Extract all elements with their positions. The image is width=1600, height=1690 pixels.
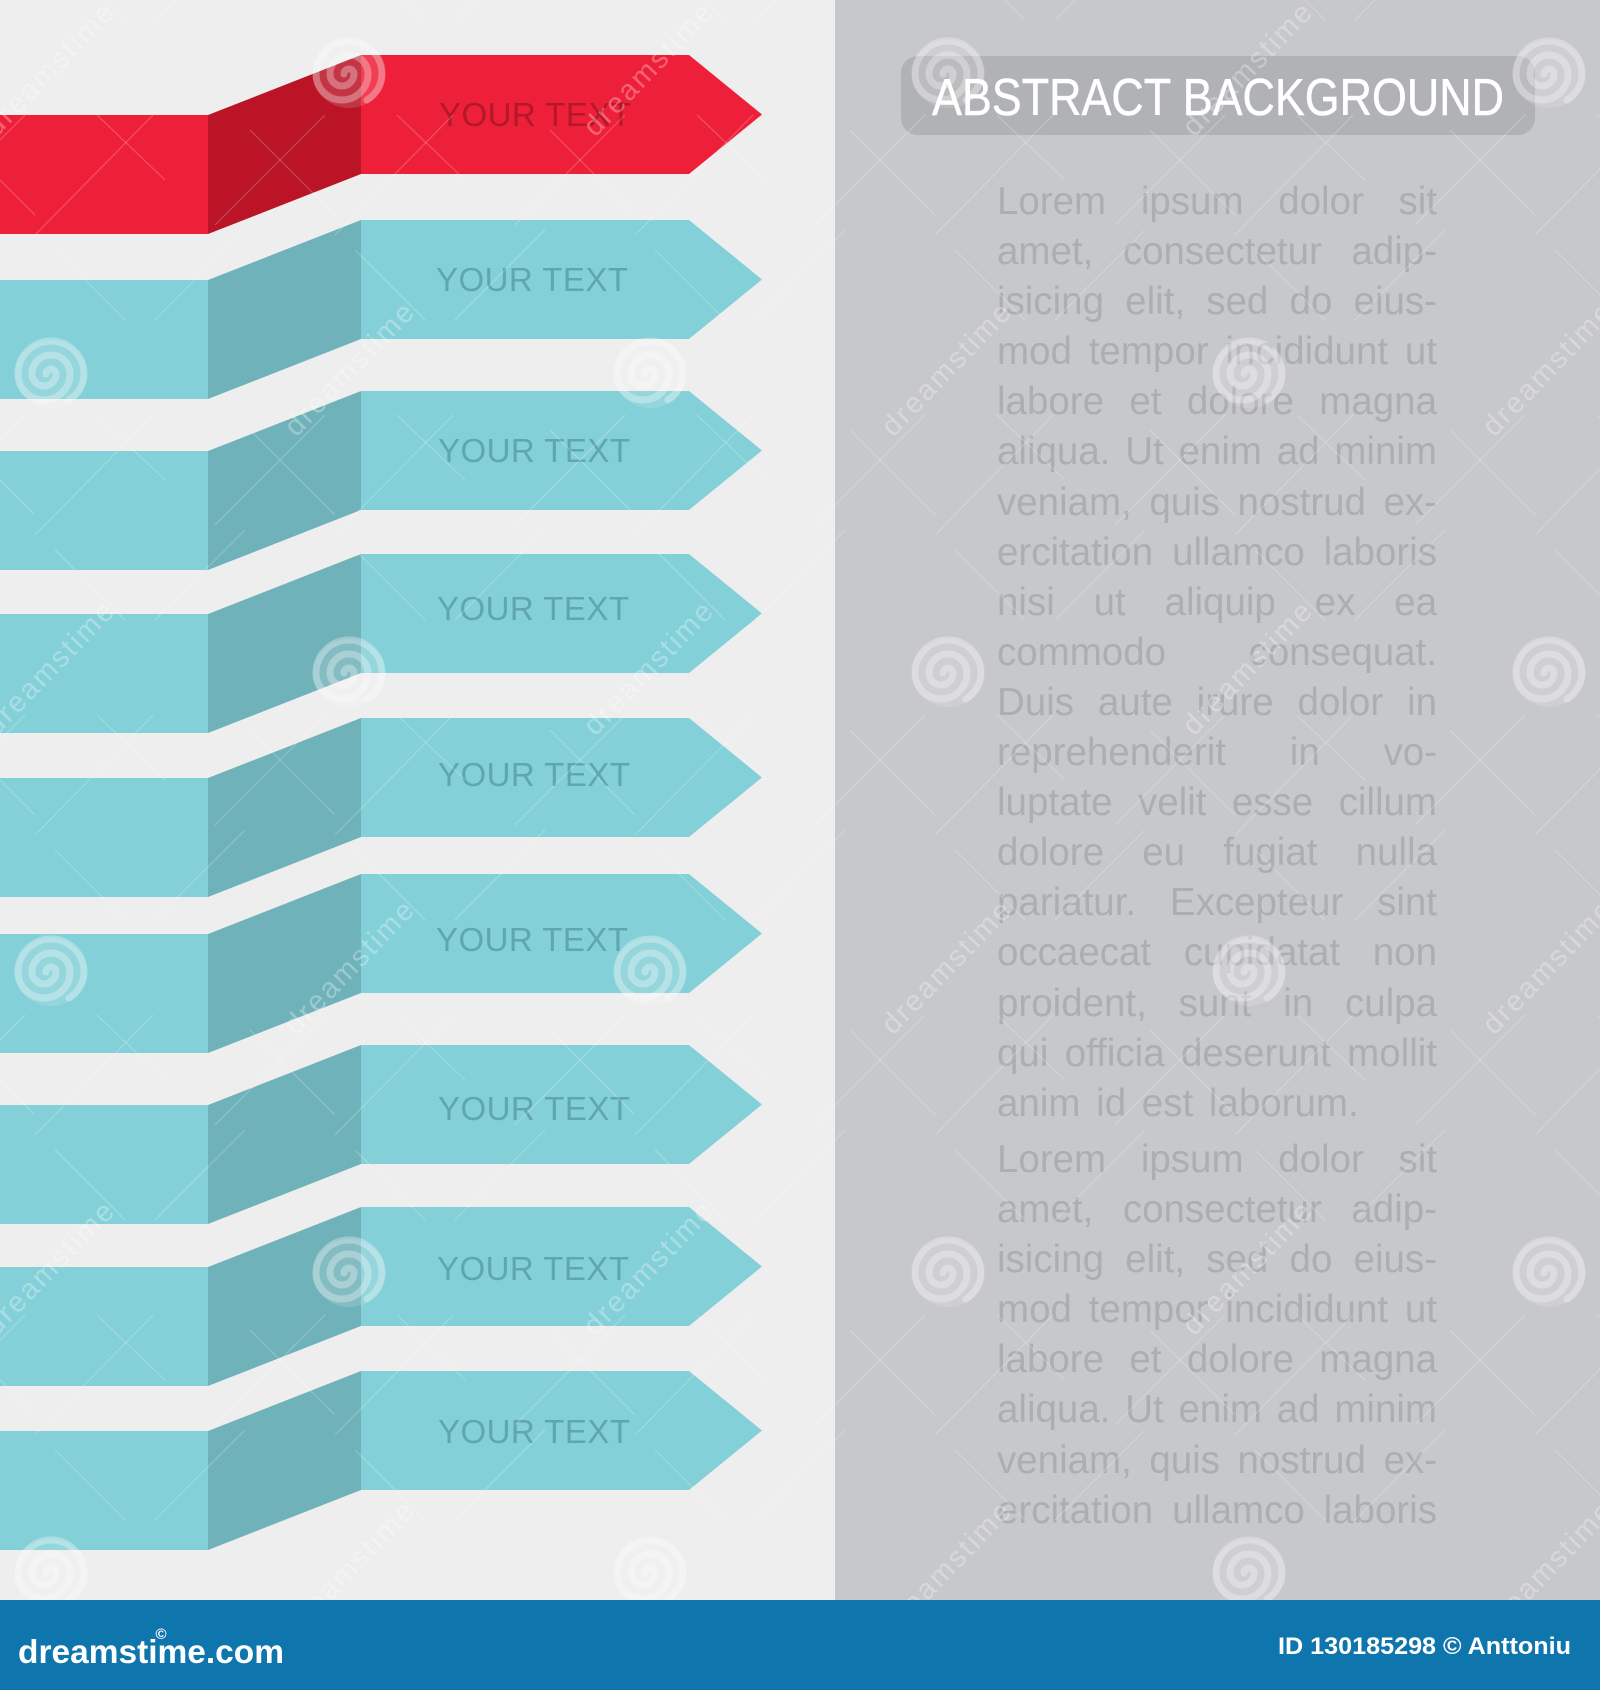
ribbon 1: red highlighted arrow bbox=[0, 55, 762, 234]
body text paragraph 1: isicing elit, sed do eius- bbox=[997, 280, 1437, 323]
body text paragraph 1: occaecat cupidatat non bbox=[997, 931, 1437, 974]
body text paragraph 2: labore et dolore magna bbox=[997, 1338, 1437, 1381]
body text paragraph 1: amet, consectetur adip- bbox=[997, 230, 1437, 273]
footer logo: © bbox=[155, 1626, 167, 1643]
body text paragraph 1: mod tempor incididunt ut bbox=[997, 330, 1437, 373]
body text paragraph 1: labore et dolore magna bbox=[997, 380, 1437, 423]
body text paragraph 1 bbox=[997, 180, 1437, 1125]
body text paragraph 1: reprehenderit in vo- bbox=[997, 731, 1437, 774]
watermark wordmarks: dreamstime bbox=[1176, 0, 1319, 143]
arrow ribbon chart bbox=[0, 55, 762, 1550]
body text paragraph 1: pariatur. Excepteur sint bbox=[997, 881, 1437, 924]
body text paragraph 1: proident, sunt in culpa bbox=[997, 982, 1437, 1024]
ribbon 9: teal arrow bbox=[0, 1371, 762, 1550]
left background panel bbox=[0, 0, 835, 1600]
ribbon 2: teal arrow: YOUR TEXT bbox=[436, 261, 628, 298]
body text paragraph 1: ercitation ullamco laboris bbox=[997, 531, 1437, 574]
body text paragraph 2: isicing elit, sed do eius- bbox=[997, 1238, 1437, 1281]
ribbon 5: teal arrow: YOUR TEXT bbox=[438, 756, 630, 793]
footer bar bbox=[0, 1600, 1600, 1690]
watermark wordmarks: dreamstime bbox=[875, 895, 1018, 1041]
ribbon 7: teal arrow bbox=[0, 1045, 762, 1224]
ribbon 3: teal arrow: YOUR TEXT bbox=[438, 432, 630, 469]
body text paragraph 1: anim id est laborum. bbox=[997, 1082, 1359, 1125]
footer image credit: ID 130185298 © Anttoniu bbox=[1278, 1633, 1571, 1660]
body text paragraph 1: dolore eu fugiat nulla bbox=[997, 831, 1437, 874]
watermark wordmarks: dreamstime bbox=[577, 0, 720, 143]
ribbon 8: teal arrow bbox=[0, 1207, 762, 1386]
body text paragraph 2: ercitation ullamco laboris bbox=[997, 1489, 1437, 1532]
watermark wordmarks: dreamstime bbox=[1176, 596, 1319, 742]
body text paragraph 2: amet, consectetur adip- bbox=[997, 1188, 1437, 1231]
body text paragraph 2: aliqua. Ut enim ad minim bbox=[997, 1388, 1437, 1431]
ribbon 1: red highlighted arrow: YOUR TEXT bbox=[439, 96, 631, 133]
footer logo: dreamstime.com bbox=[18, 1633, 284, 1670]
watermark wordmarks: dreamstime bbox=[278, 895, 421, 1041]
ribbon 4: teal arrow bbox=[0, 554, 762, 733]
ribbon 6: teal arrow: YOUR TEXT bbox=[436, 921, 628, 958]
ribbon 6: teal arrow bbox=[0, 874, 762, 1053]
body text paragraph 1: Duis aute irure dolor in bbox=[997, 681, 1437, 724]
body text paragraph 1: commodo consequat. bbox=[997, 631, 1437, 674]
body text paragraph 1: nisi ut aliquip ex ea bbox=[997, 581, 1437, 624]
body text paragraph 1: veniam, quis nostrud ex- bbox=[997, 481, 1437, 524]
ribbon 3: teal arrow bbox=[0, 391, 762, 570]
ribbon 8: teal arrow: YOUR TEXT bbox=[437, 1250, 629, 1287]
body text paragraph 1: qui officia deserunt mollit bbox=[997, 1032, 1437, 1075]
watermark wordmarks: dreamstime bbox=[1176, 1196, 1319, 1342]
body text paragraph 2: veniam, quis nostrud ex- bbox=[997, 1439, 1437, 1482]
watermark wordmarks: dreamstime bbox=[577, 1196, 720, 1342]
body text paragraph 2: Lorem ipsum dolor sit bbox=[997, 1138, 1437, 1181]
body text paragraph 1: luptate velit esse cillum bbox=[997, 781, 1437, 824]
body text paragraph 1: Lorem ipsum dolor sit bbox=[997, 180, 1437, 223]
body text paragraph 2 bbox=[997, 1138, 1437, 1532]
ribbon 5: teal arrow bbox=[0, 718, 762, 897]
watermark wordmarks: dreamstime bbox=[278, 297, 421, 443]
title pill: ABSTRACT BACKGROUND bbox=[932, 69, 1504, 127]
ribbon 7: teal arrow: YOUR TEXT bbox=[438, 1090, 630, 1127]
body text paragraph 2: mod tempor incididunt ut bbox=[997, 1288, 1437, 1331]
ribbon 9: teal arrow: YOUR TEXT bbox=[438, 1413, 630, 1450]
watermark wordmarks: dreamstime bbox=[577, 596, 720, 742]
right grey panel bbox=[835, 0, 1600, 1600]
watermark wordmarks: dreamstime bbox=[875, 297, 1018, 443]
body text paragraph 1: aliqua. Ut enim ad minim bbox=[997, 430, 1437, 473]
ribbon 4: teal arrow: YOUR TEXT bbox=[437, 590, 629, 627]
ribbon 2: teal arrow bbox=[0, 220, 762, 399]
